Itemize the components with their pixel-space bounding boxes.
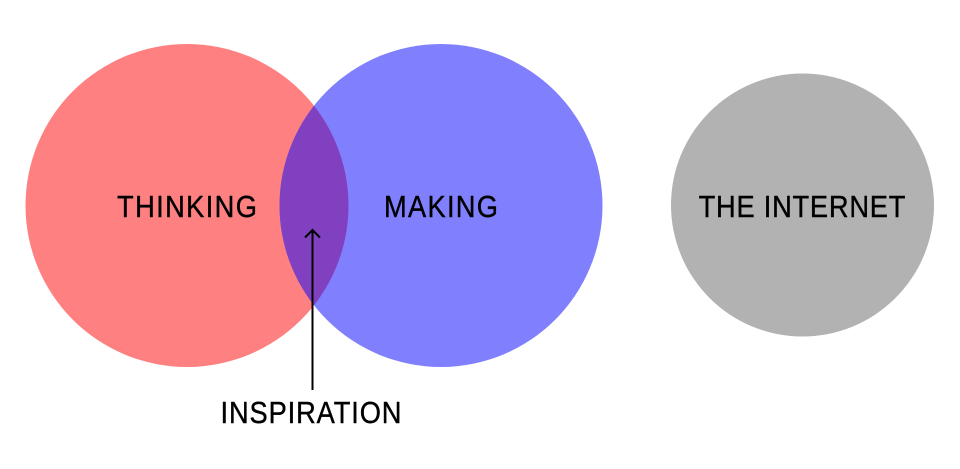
label: making: MAKING: [384, 190, 498, 224]
label: thinking: THINKING: [117, 190, 257, 224]
circle: thinking: [26, 44, 348, 367]
arrow: to overlap: [305, 230, 320, 390]
label: inspiration: INSPIRATION: [220, 396, 402, 430]
overlap: inspiration: [280, 106, 348, 305]
label: the internet: THE INTERNET: [699, 190, 906, 224]
venn diagram infographic: [26, 44, 934, 424]
circle: making: [280, 44, 602, 367]
circle: the internet: [671, 74, 934, 336]
